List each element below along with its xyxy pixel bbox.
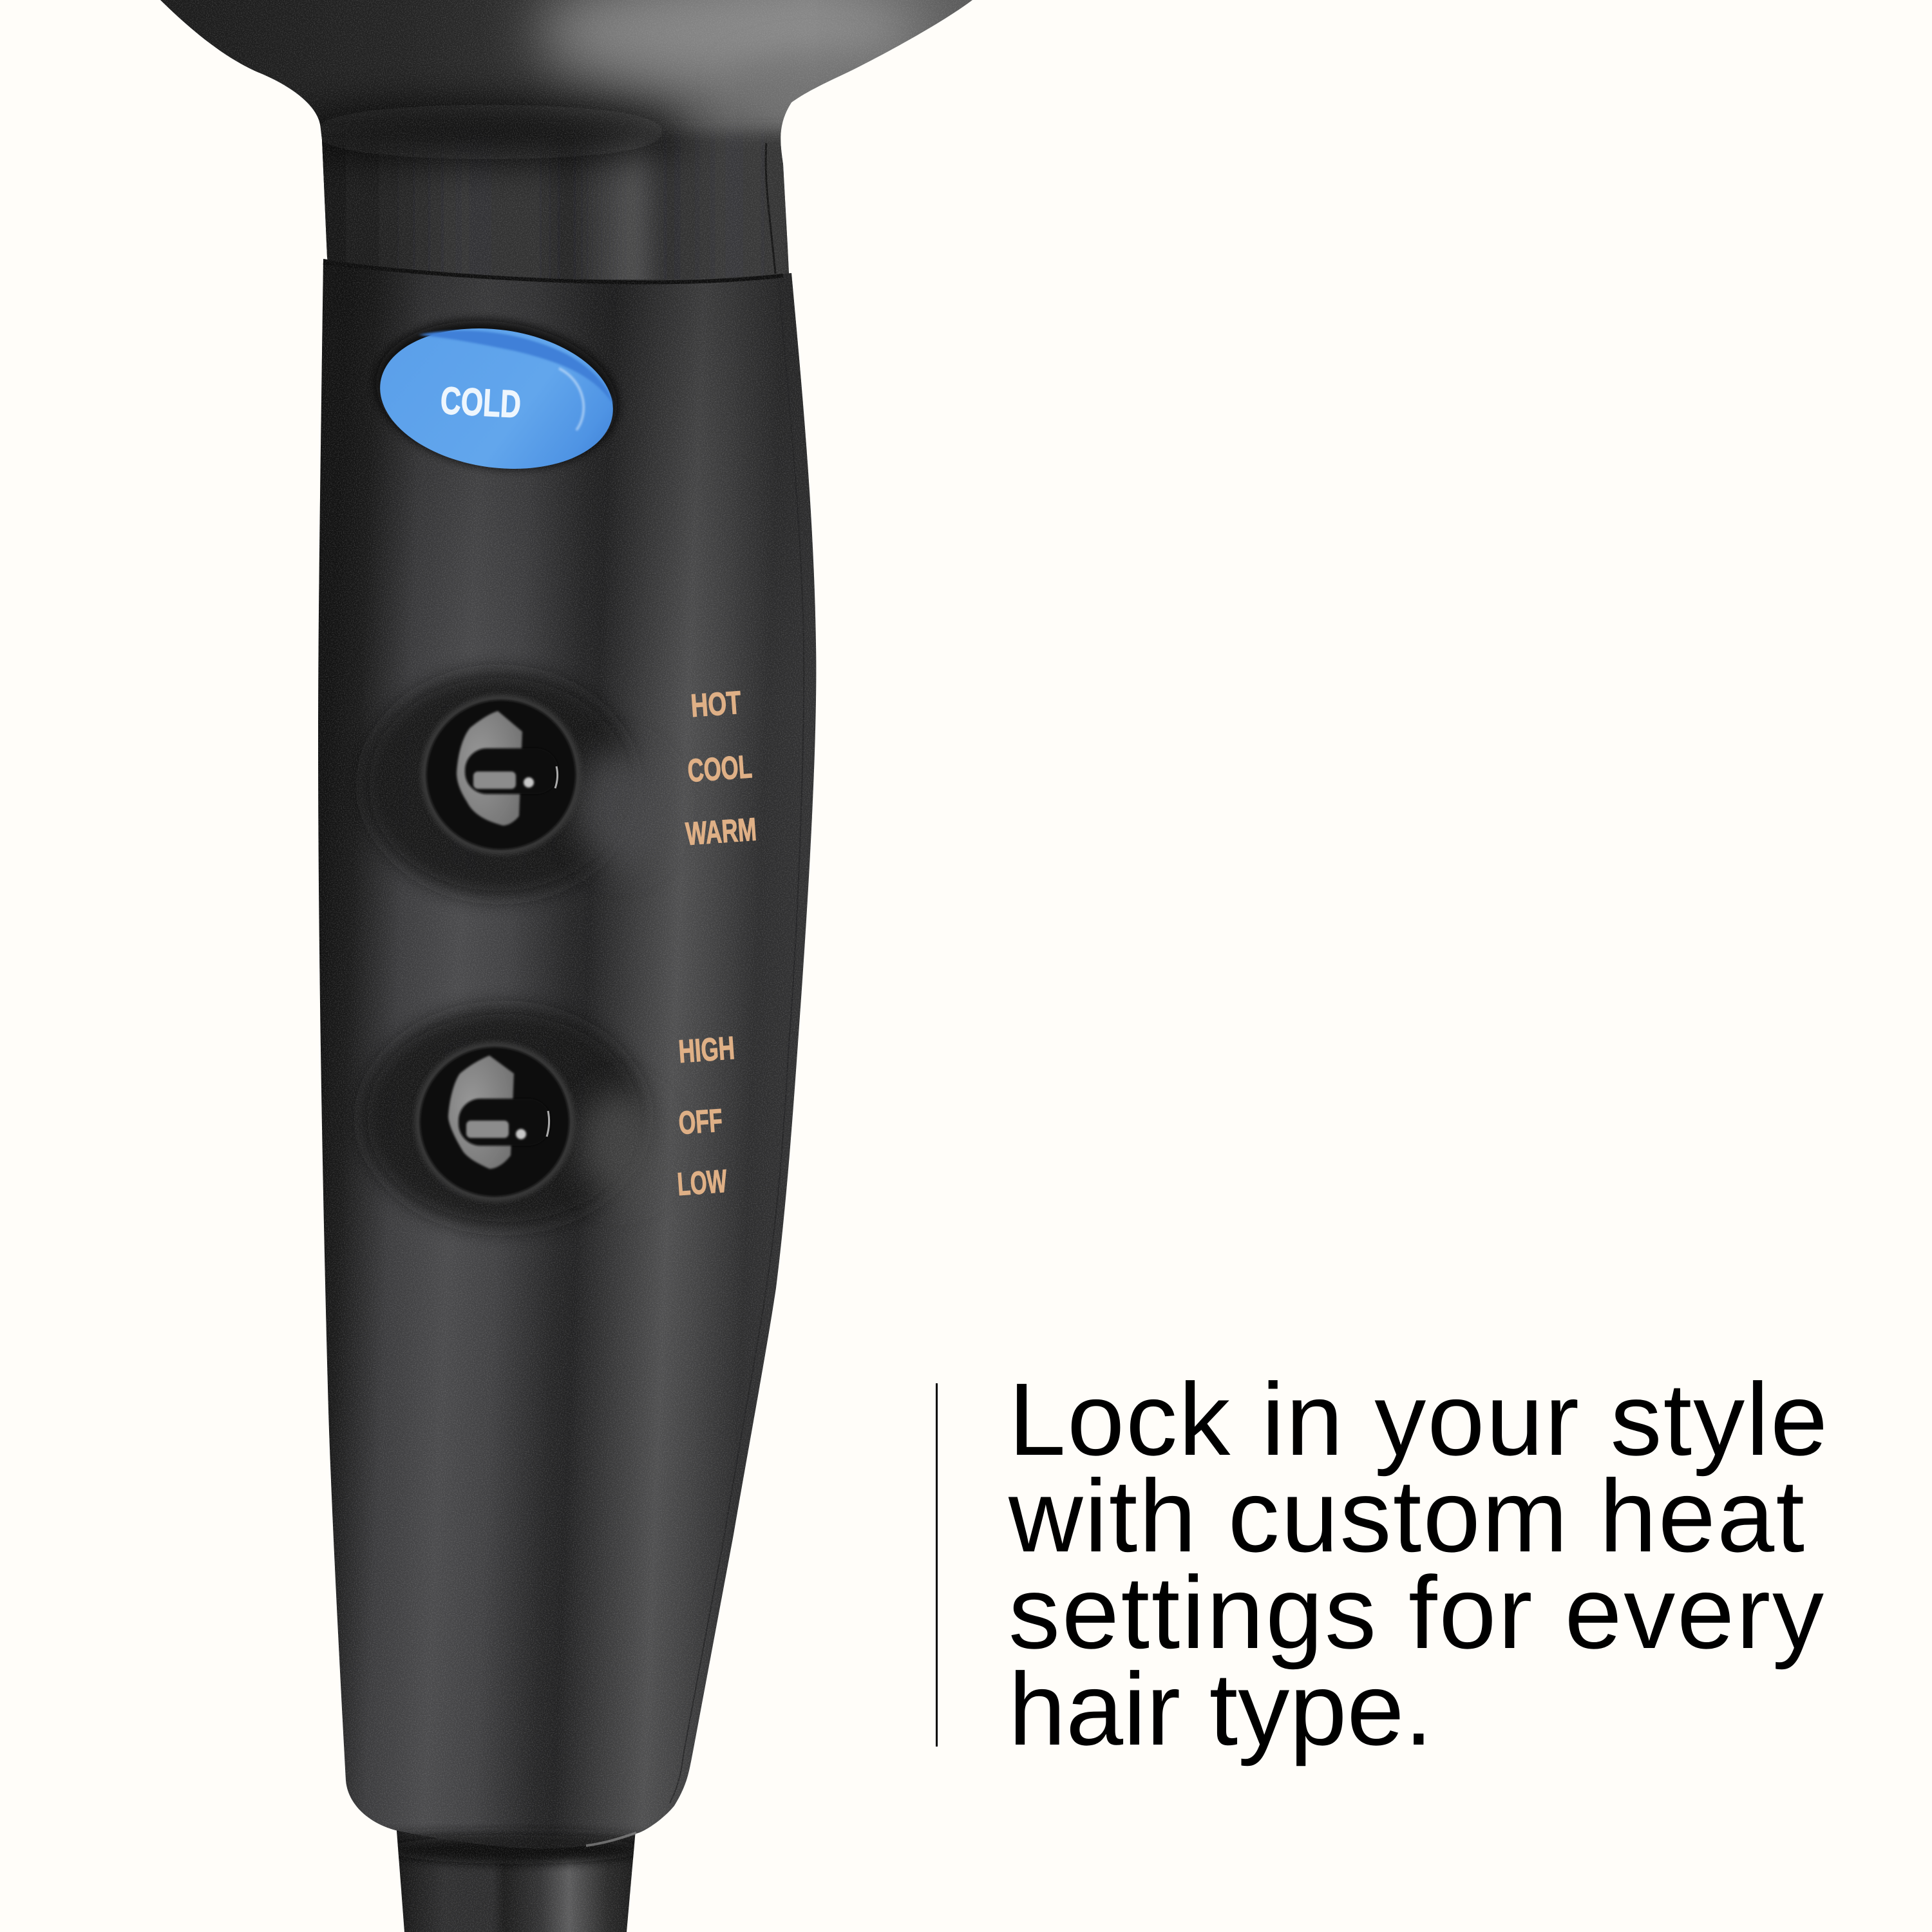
speed labels [676,1030,736,1202]
dryer head and neck [155,0,979,299]
speed labels: HIGH [677,1030,736,1070]
caption text: with custom heat [1008,1458,1804,1573]
caption text [1008,1361,1828,1766]
caption text: hair type. [1009,1651,1433,1766]
heat toggle switch [421,695,581,855]
heat labels: COOL [687,748,753,789]
heat labels: HOT [690,685,743,724]
recess: heat switch [363,671,667,898]
hair dryer product photo [155,0,979,1932]
heat labels: WARM [685,811,757,852]
speed labels: OFF [677,1102,724,1141]
caption text: settings for every [1009,1555,1824,1670]
surface grain [155,0,979,1932]
handle [309,254,824,1858]
heat labels [685,685,757,852]
cold shot button [366,306,627,483]
collar seam [323,263,783,282]
caption divider [936,1383,938,1747]
power cord [397,1830,635,1932]
speed toggle switch [415,1042,574,1202]
button label: COLD [439,379,522,426]
caption text: Lock in your style [1009,1361,1828,1477]
speed labels: LOW [676,1163,728,1202]
seam line [669,473,804,1803]
recess: speed switch [361,1007,663,1229]
handle rim highlight [586,1833,636,1846]
